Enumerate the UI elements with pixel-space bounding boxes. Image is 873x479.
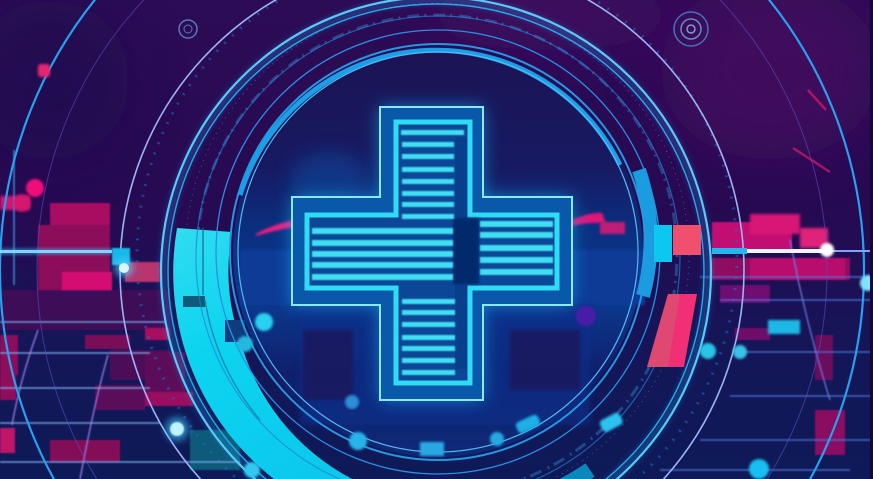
HUD rings: thin tick arcs — [137, 0, 737, 479]
top stripes — [401, 130, 464, 219]
small emblems top — [179, 12, 708, 46]
band details — [183, 228, 260, 420]
dark right edge — [870, 0, 873, 479]
cross glow — [292, 107, 572, 400]
ring interior — [233, 47, 643, 457]
cross — [292, 107, 572, 400]
dark centre shadow — [455, 137, 467, 369]
main neon rings — [161, 0, 711, 479]
inner panel — [307, 122, 557, 383]
horizontal light beams — [0, 248, 873, 265]
left stripes — [312, 228, 453, 280]
coral panels right — [647, 225, 701, 367]
neon grid lines left and right — [0, 150, 873, 479]
magenta scratches top right — [793, 90, 830, 172]
cross body — [292, 107, 572, 400]
magenta glitch blocks right — [710, 214, 850, 455]
bottom stripes — [402, 299, 455, 375]
glowing skyline behind cross — [240, 152, 645, 425]
outer neon outline — [292, 107, 572, 400]
cyan segmented arc band — [173, 170, 651, 479]
right stripes — [480, 221, 553, 275]
magenta streaks in ring — [256, 213, 625, 236]
magenta glitch blocks left — [0, 196, 240, 470]
